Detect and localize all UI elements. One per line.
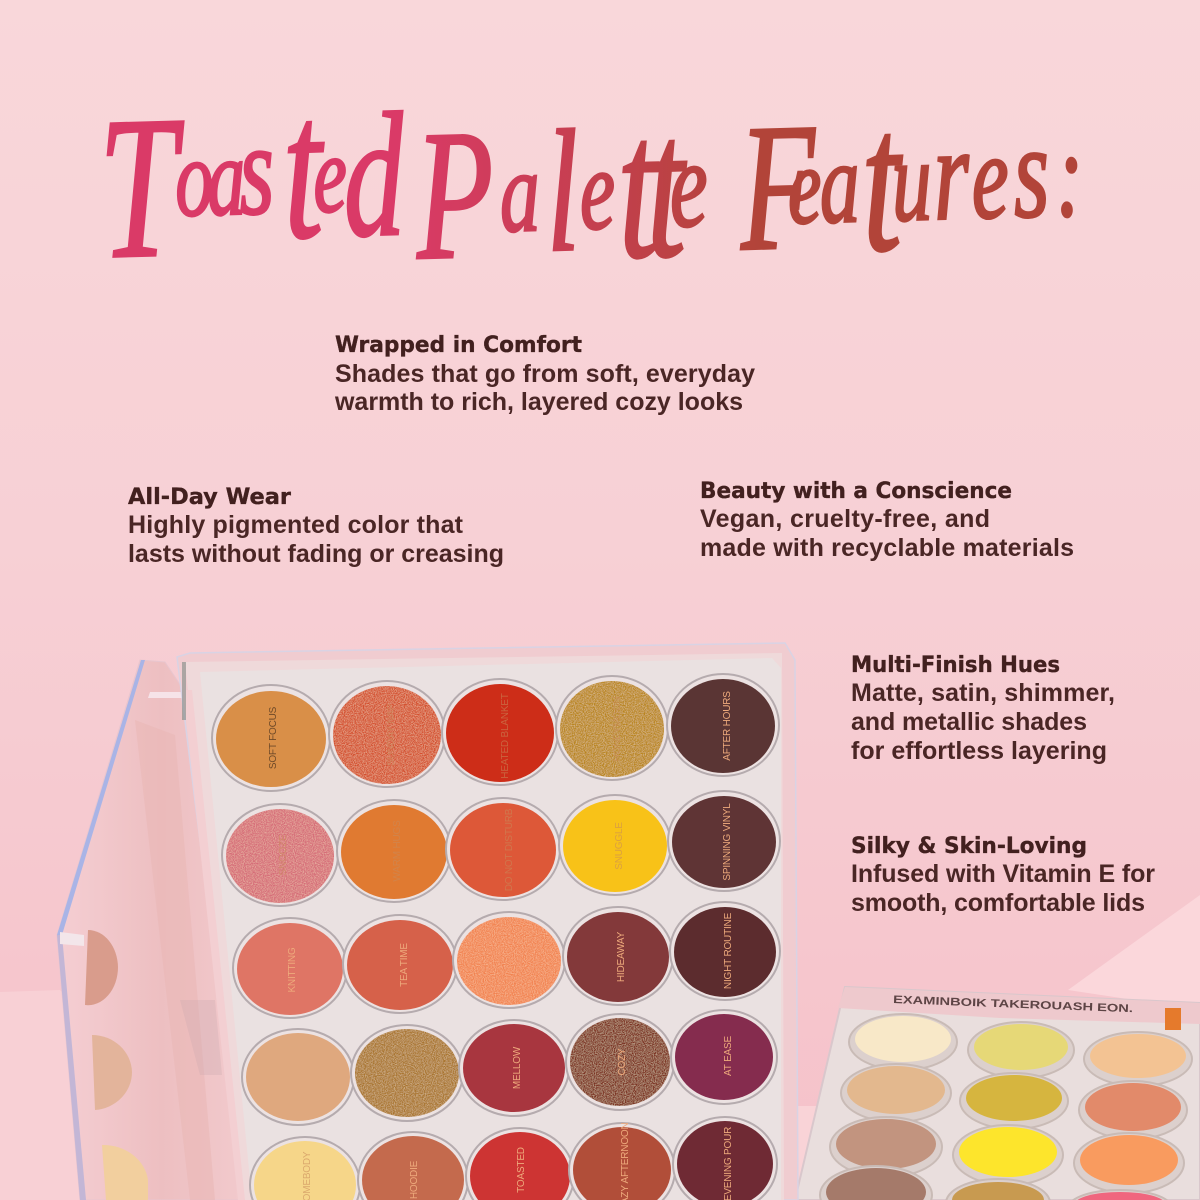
shade name labels: SOFT FOCUS (268, 706, 279, 769)
floor surface (0, 990, 260, 1200)
shade name labels: TOASTED (516, 1147, 527, 1193)
large palette: tray (177, 643, 798, 1200)
text block: Beauty with a Conscience: made with recyclable materials (700, 534, 1074, 562)
shade name labels: KNITTING (287, 947, 298, 993)
title: d (340, 77, 408, 274)
text block: All-Day Wear: Highly pigmented color that (128, 511, 464, 539)
text block: Beauty with a Conscience: Beauty with a Conscience (700, 478, 1012, 504)
large palette: open clear lid (57, 660, 247, 1200)
title (96, 34, 1087, 316)
shade name labels: SNOOZE (278, 834, 289, 876)
title: e (578, 124, 617, 255)
title: r (931, 99, 971, 248)
text block: All-Day Wear (128, 484, 504, 568)
title: t (280, 56, 328, 281)
title: s (237, 98, 276, 243)
shade name labels: HIDEAWAY (616, 931, 627, 982)
shade name labels: HOODIE (409, 1160, 420, 1199)
shade name labels: HEATED BLANKET (500, 693, 511, 779)
text block: Multi-Finish Hues: and metallic shades (851, 708, 1087, 736)
small palette, lower right (795, 987, 1200, 1200)
text block: Beauty with a Conscience (700, 478, 1074, 562)
text block: All-Day Wear: lasts without fading or creasing (128, 540, 504, 568)
title: t (614, 75, 662, 301)
text block: Multi-Finish Hues: Multi-Finish Hues (851, 652, 1060, 678)
shade name labels: SUNDAY NAP (386, 703, 397, 766)
title: o (173, 118, 215, 240)
text block: Silky & Skin-Loving: Silky & Skin-Loving (851, 833, 1087, 859)
title: e (668, 116, 710, 254)
title: a (205, 117, 247, 239)
shade name labels: AFTER HOURS (722, 691, 733, 761)
floor surface right (790, 1106, 860, 1200)
shade name labels: EVENING POUR (723, 1127, 734, 1200)
title: P (412, 92, 497, 299)
shade name labels: NIGHT ROUTINE (723, 912, 734, 989)
text block: Wrapped in Comfort: Wrapped in Comfort (335, 332, 582, 358)
text block: Multi-Finish Hues (851, 652, 1115, 765)
text block: Multi-Finish Hues: Matte, satin, shimmer, (851, 679, 1115, 707)
title: e (786, 126, 823, 248)
title: e (970, 109, 1011, 245)
text block: Wrapped in Comfort (334, 332, 755, 416)
title: u (890, 116, 933, 246)
title: l (543, 96, 582, 289)
shade name labels: TEA TIME (399, 943, 410, 987)
light pink box behind small palette (1068, 895, 1200, 1010)
title: T (96, 74, 189, 301)
title: a (498, 126, 541, 257)
text block: Silky & Skin-Loving: smooth, comfortable lids (851, 889, 1145, 917)
text block: All-Day Wear: All-Day Wear (128, 484, 292, 510)
eyeshadow pans (212, 674, 780, 1200)
text block: Silky & Skin-Loving: Infused with Vitamin E for (851, 860, 1155, 888)
title: t (642, 75, 690, 300)
shade name labels: WARM HUGS (392, 820, 403, 882)
title: e (311, 114, 349, 236)
title: F (736, 85, 820, 289)
title: t (858, 68, 906, 294)
text block: Beauty with a Conscience: Vegan, cruelty-free, and (700, 505, 990, 533)
shade name labels: MELLOW (512, 1046, 523, 1089)
text block: Wrapped in Comfort: warmth to rich, layered cozy looks (334, 388, 743, 416)
shade name labels: COZY (617, 1048, 628, 1075)
title: : (1053, 107, 1085, 242)
title: s (1011, 97, 1051, 246)
small palette, lower right: EXAMINBOIK TAKEROUASH EON. (893, 994, 1133, 1015)
text block: Silky & Skin-Loving (851, 833, 1155, 917)
shade name labels: SPINNING VINYL (722, 803, 733, 881)
shade name labels: SNUGGLE (614, 822, 625, 870)
shade name labels: DO NOT DISTURB (504, 808, 515, 891)
shade name labels: HONEYMOON (612, 697, 623, 761)
text block: Wrapped in Comfort: Shades that go from soft, everyday (335, 360, 755, 388)
shade name labels: AT EASE (723, 1036, 734, 1076)
text block: Multi-Finish Hues: for effortless layering (851, 737, 1107, 765)
shade name labels (268, 691, 734, 1200)
title: a (818, 118, 861, 248)
